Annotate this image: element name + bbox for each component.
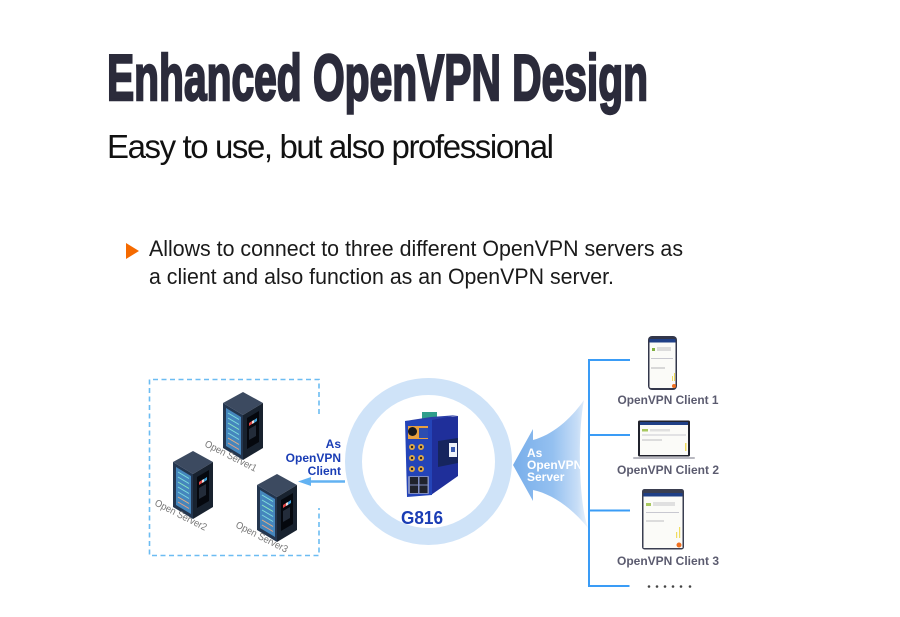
arrow: from clients xyxy=(513,400,588,528)
server 3 xyxy=(234,474,297,556)
client 2: laptop: OpenVPN Client 2 xyxy=(617,463,719,477)
dashed server boundary xyxy=(150,380,319,556)
bullet text xyxy=(149,236,683,289)
device label: G816 xyxy=(401,508,443,528)
ring around device xyxy=(354,386,504,536)
label: as OpenVPN server: As xyxy=(527,446,543,460)
label: as OpenVPN server: OpenVPN xyxy=(527,458,582,472)
bullet point xyxy=(126,236,683,289)
server 3: Open Server3 xyxy=(234,520,290,556)
device: G816 router xyxy=(405,412,458,497)
icon: orange bullet triangle xyxy=(126,243,139,259)
server 2 xyxy=(153,451,213,534)
more clients ellipsis xyxy=(648,585,691,588)
label: as OpenVPN client: Client xyxy=(308,464,341,478)
client 3: tablet: OpenVPN Client 3 xyxy=(617,554,719,568)
panel: OpenVPN servers xyxy=(150,380,319,556)
client 1: phone xyxy=(618,336,719,407)
client 2: laptop xyxy=(617,420,719,477)
label: as OpenVPN client: As xyxy=(326,437,341,451)
icon: phone xyxy=(648,336,677,390)
server 1: Open Server1 xyxy=(203,439,259,475)
client 1: phone: OpenVPN Client 1 xyxy=(618,393,719,407)
label: as OpenVPN server xyxy=(527,446,582,484)
bullet text: Allows to connect to three different OpenVPN servers as xyxy=(149,236,683,261)
bullet text: a client and also function as an OpenVPN server. xyxy=(149,264,614,289)
icon: tablet xyxy=(642,489,684,550)
label: as OpenVPN server: Server xyxy=(527,470,565,484)
icon: laptop xyxy=(633,420,695,459)
subtitle: Easy to use, but also professional xyxy=(107,128,554,165)
server 2: Open Server2 xyxy=(153,498,209,534)
client branch lines xyxy=(589,360,630,586)
label: as OpenVPN client xyxy=(286,437,341,478)
server 1 xyxy=(203,392,263,475)
arrow: to servers xyxy=(298,477,345,486)
label: as OpenVPN client: OpenVPN xyxy=(286,451,341,465)
client 3: tablet xyxy=(617,489,719,568)
